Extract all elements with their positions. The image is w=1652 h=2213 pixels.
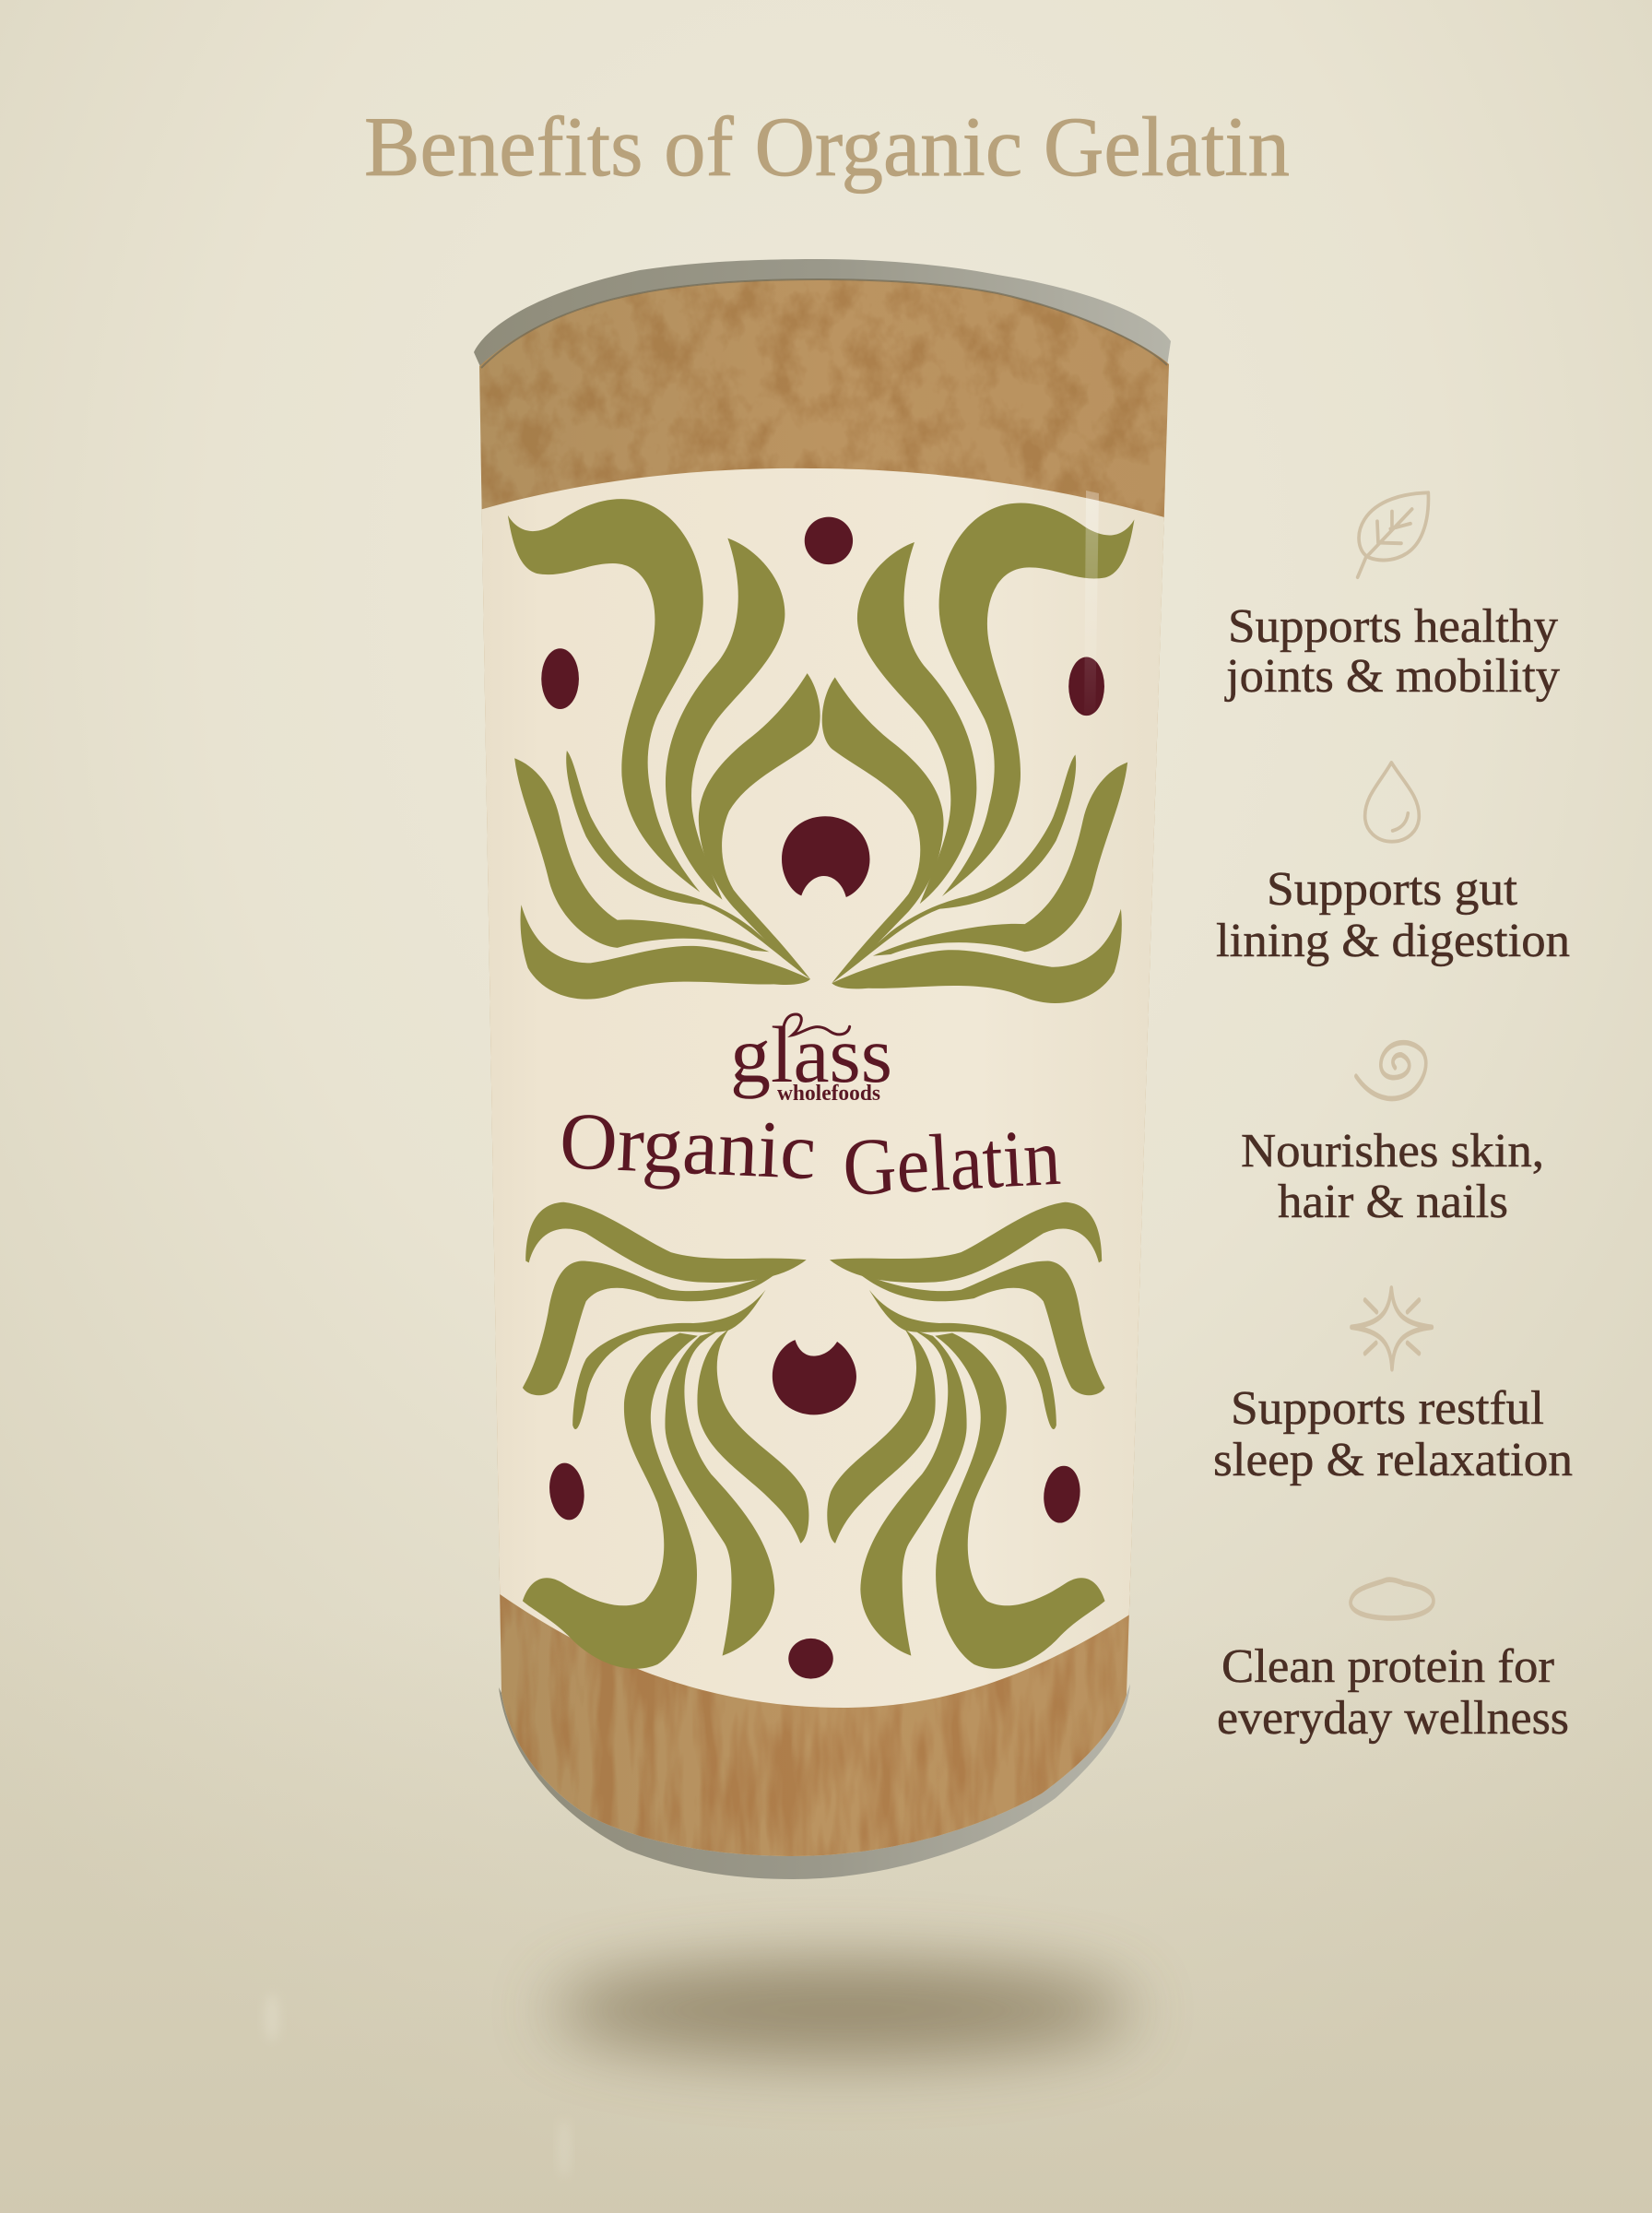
upper label ornament (508, 499, 1134, 1003)
kraft paper body and cream label band (479, 279, 1169, 1856)
brand logo: wholefoods (777, 1082, 880, 1106)
benefit: sleep (1213, 1288, 1573, 1486)
right half of upper leaves (822, 503, 1134, 1003)
can bottom rim (499, 1684, 1130, 1879)
lower right dot (1039, 1461, 1085, 1528)
text: joints: joints & mobility (1224, 650, 1560, 703)
text: skin: Nourishes skin, (1241, 1125, 1544, 1178)
icon: leaf (1358, 492, 1428, 577)
icon: sparkle (1351, 1288, 1432, 1369)
left half of lower leaves (523, 1202, 808, 1669)
product name: Organic (558, 1096, 818, 1197)
text: gut: lining & digestion (1216, 915, 1570, 967)
icon: spiral (1356, 1043, 1426, 1098)
right half of lower leaves (827, 1202, 1105, 1669)
text: protein: everyday wellness (1217, 1692, 1569, 1745)
right dot (1068, 657, 1104, 716)
lower centre dot (788, 1639, 833, 1679)
text: protein: Clean protein for (1221, 1640, 1554, 1693)
rim inner shadow line (481, 279, 1167, 368)
benefit: protein (1217, 1580, 1569, 1745)
floor shadow under the can (552, 1962, 1133, 2058)
crescent (782, 816, 870, 897)
text: gut: Supports gut (1267, 863, 1518, 916)
lower left dot (545, 1458, 589, 1525)
text: skin: hair & nails (1278, 1176, 1508, 1228)
text: sleep (1213, 1382, 1573, 1486)
left half of upper leaves (508, 499, 820, 1000)
text: joints: Supports healthy (1228, 600, 1558, 653)
text: sleep: Supports restful (1231, 1382, 1544, 1435)
benefit: joints (1224, 492, 1560, 703)
text: sleep: sleep & relaxation (1213, 1434, 1573, 1486)
can top rim (474, 259, 1171, 369)
benefit: gut (1216, 763, 1570, 967)
text: skin (1241, 1125, 1544, 1228)
top dot (805, 517, 853, 564)
text: joints (1224, 600, 1560, 703)
label glare strip (1084, 491, 1099, 728)
left dot (541, 648, 579, 709)
product can (452, 258, 1198, 1899)
lower crescent (773, 1340, 856, 1414)
text: gut (1216, 863, 1570, 967)
benefit: skin (1241, 1043, 1544, 1228)
icon: gelatin mound (1351, 1580, 1434, 1618)
product name (558, 1096, 1063, 1213)
text: protein (1217, 1640, 1569, 1745)
title: Benefits of Organic Gelatin (364, 100, 1290, 194)
brand logo: glass (730, 1010, 892, 1099)
lower label ornament (523, 1202, 1105, 1679)
product name: Gelatin (841, 1113, 1063, 1213)
icon: water drop (1365, 763, 1419, 842)
